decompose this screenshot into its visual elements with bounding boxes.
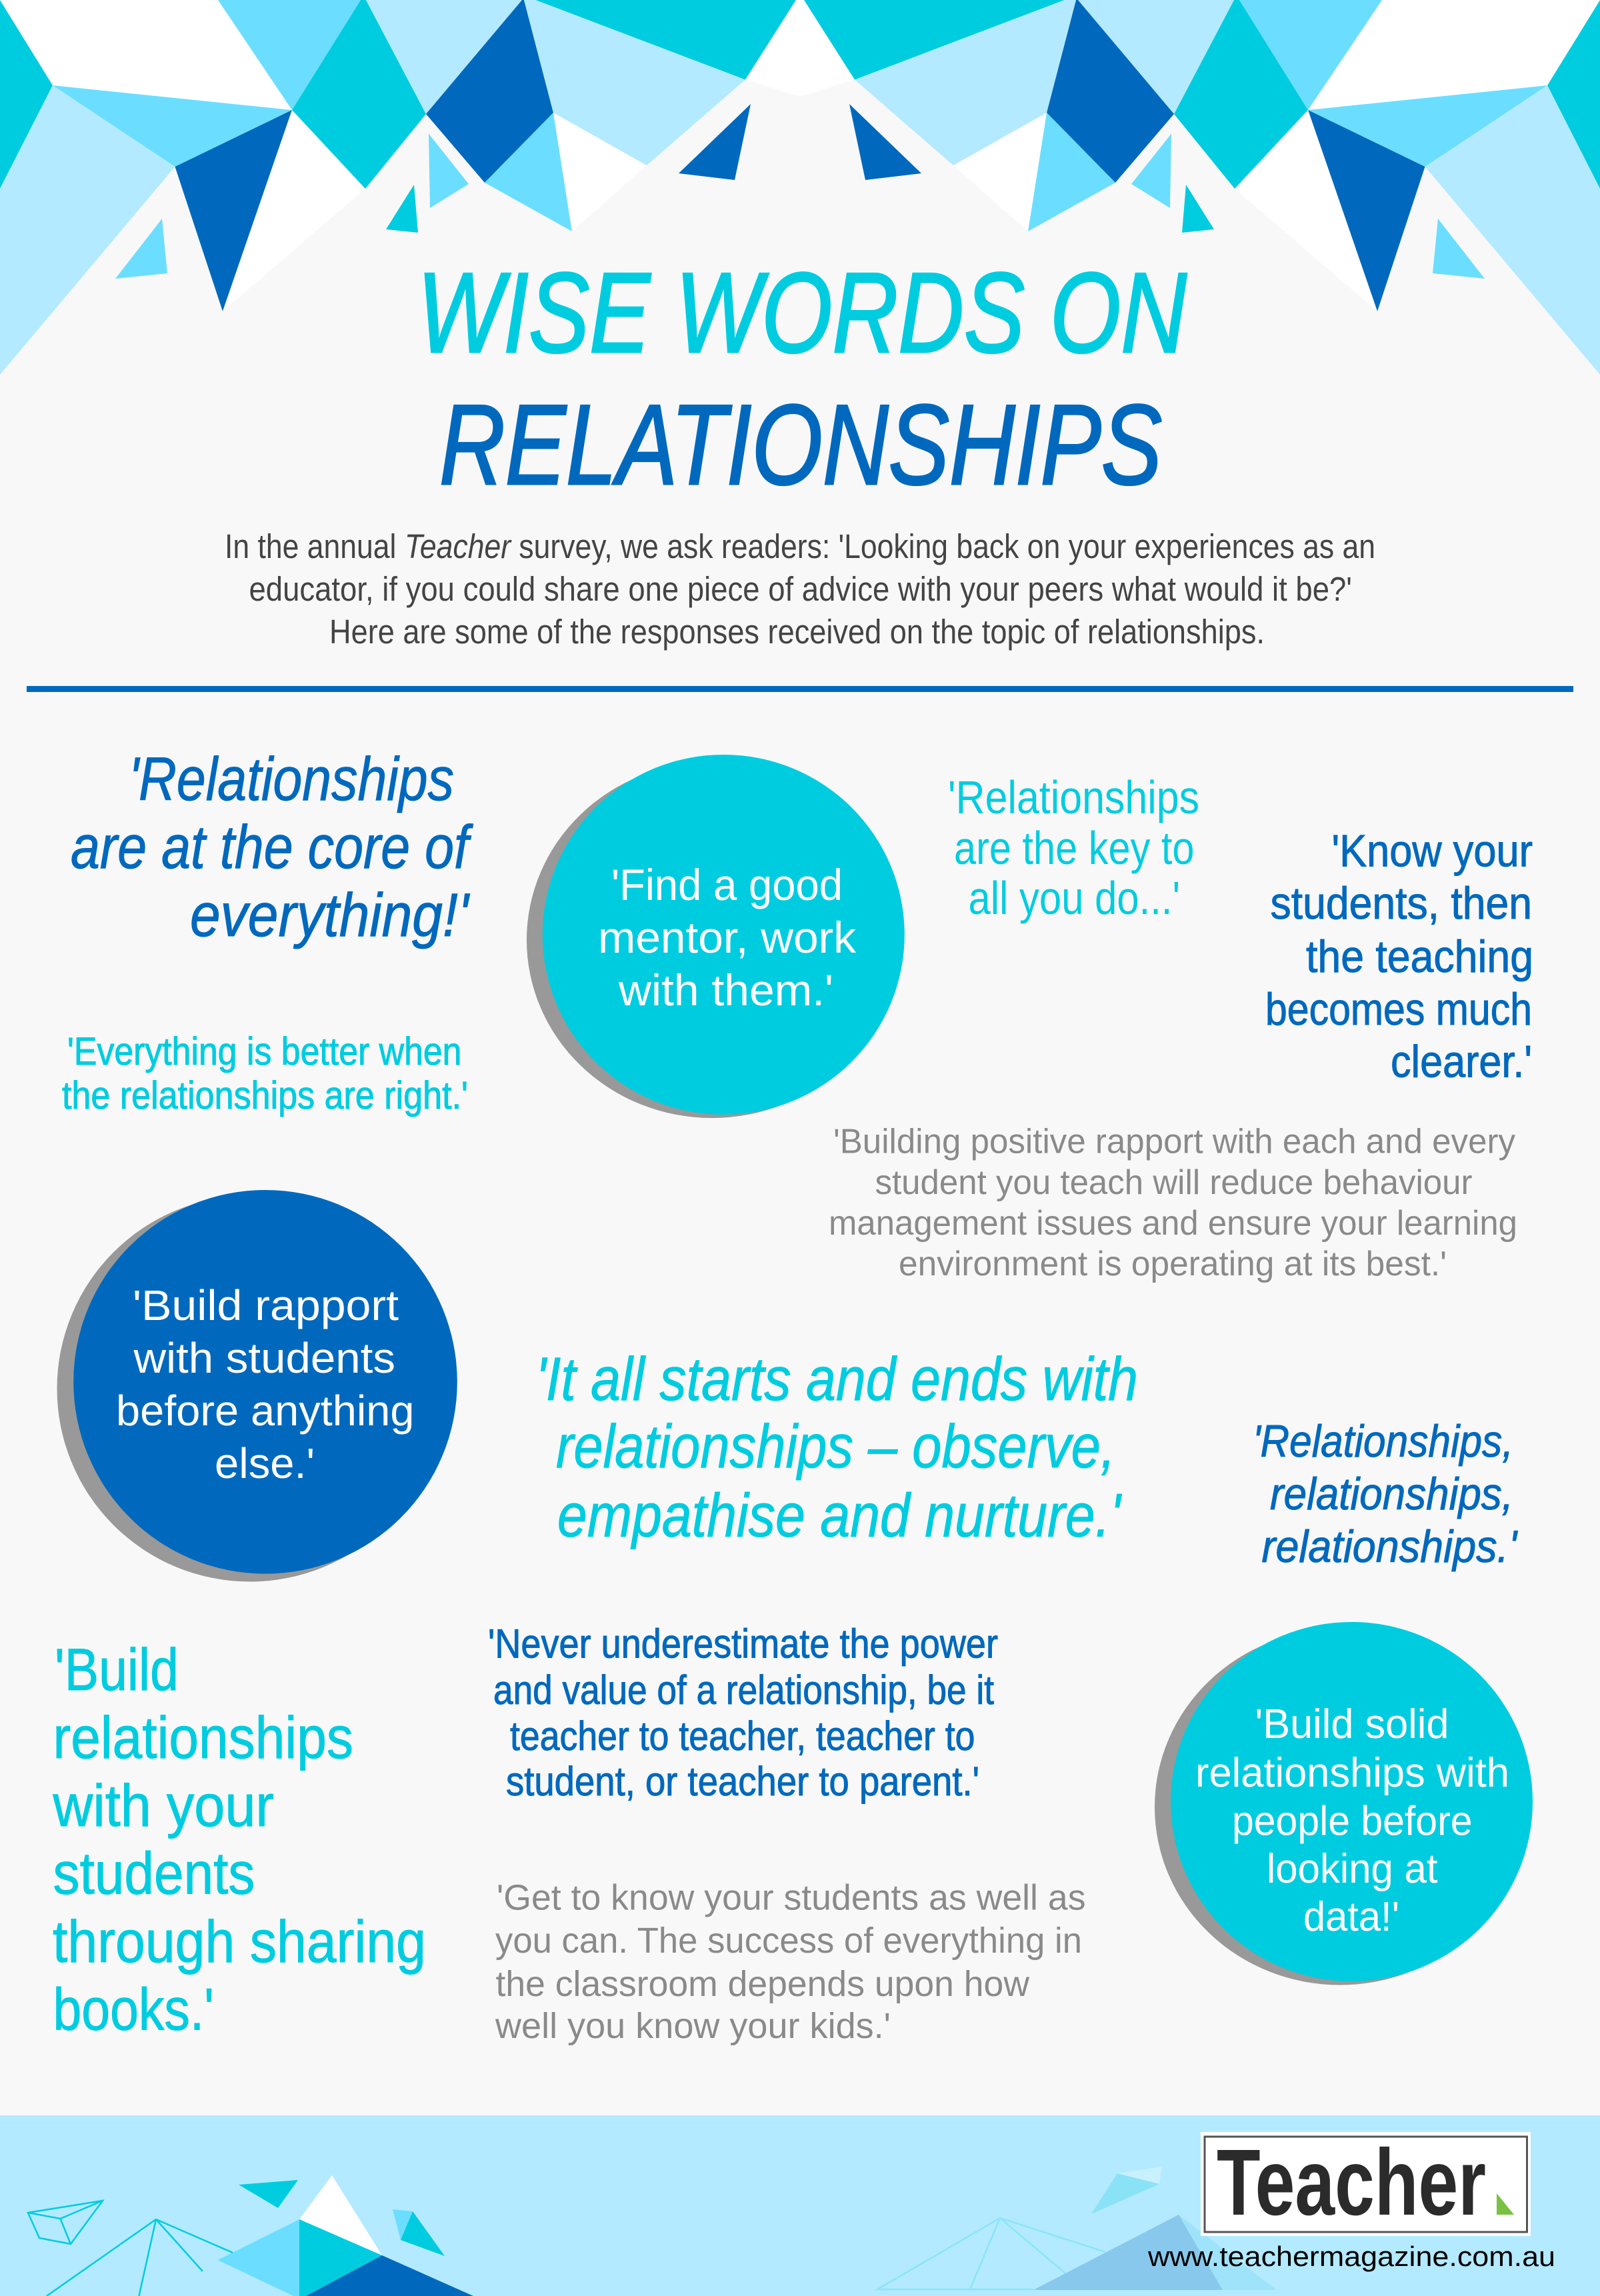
quote: know your students: clearer.': [1391, 1036, 1532, 1087]
quote: know your students: students, then: [1271, 878, 1532, 929]
quote: get to know your students: you can. The success of everything in: [495, 1921, 1082, 1961]
circle: find a good mentor: mentor, work: [598, 913, 857, 962]
quote: relationships x3: relationships,: [1270, 1469, 1513, 1519]
divider: [27, 686, 1573, 692]
quote: build relationships through books: 'Build: [55, 1636, 179, 1703]
quote: everything is better: 'Everything is better when: [67, 1030, 461, 1073]
quote: relationships x3: relationships.': [1261, 1521, 1518, 1572]
quote: relationships are the key: 'Relationships: [948, 771, 1199, 823]
quote: it all starts and ends: [536, 1345, 1138, 1549]
quote: never underestimate: student, or teacher to parent.': [506, 1759, 979, 1804]
quote: know your students: becomes much: [1265, 984, 1532, 1035]
quote: know your students: 'Know your: [1332, 825, 1533, 876]
circle: find a good mentor: with them.': [618, 965, 833, 1015]
logo: Teacher: Teacher: [1217, 2129, 1486, 2235]
footer band: [0, 2115, 1600, 2296]
circle: build rapport: [57, 1190, 457, 1581]
quote: building positive rapport: management issues and ensure your learning: [829, 1204, 1517, 1243]
quote: everything is better: the relationships are right.': [62, 1074, 468, 1117]
footer left geometric shapes: [28, 2175, 473, 2296]
circle: build solid relationships: relationships with: [1195, 1750, 1509, 1796]
intro text: In the annual Teacher survey, we ask readers: 'Looking back on your experiences as an: [225, 527, 1375, 565]
quote: relationships are at the core: are at the core of: [71, 813, 473, 881]
quote: building positive rapport: [829, 1123, 1517, 1283]
quote: building positive rapport: 'Building positive rapport with each and every: [833, 1123, 1515, 1161]
intro text: [225, 527, 1375, 651]
circle: build solid relationships: data!': [1303, 1894, 1399, 1940]
circle: build solid relationships: [1155, 1622, 1533, 1985]
quote: know your students: the teaching: [1306, 931, 1533, 982]
website url: www.teachermagazine.com.au: [1147, 2241, 1555, 2272]
quote: build relationships through books: [53, 1636, 426, 2043]
intro text: Here are some of the responses received on the topic of relationships.: [329, 613, 1265, 651]
quote: building positive rapport: environment is operating at its best.': [899, 1245, 1447, 1283]
quote: everything is better: [62, 1030, 468, 1117]
quote: build relationships through books: books.': [53, 1976, 214, 2043]
quote: build relationships through books: through sharing: [53, 1908, 426, 1975]
circle: build solid relationships: looking at: [1267, 1846, 1437, 1892]
quote: relationships are at the core: 'Relationships: [129, 745, 454, 813]
quote: get to know your students: [495, 1877, 1085, 2046]
quote: relationships are the key: all you do...': [968, 872, 1180, 924]
circle: build rapport: before anything: [116, 1387, 415, 1435]
quote: never underestimate: [488, 1621, 998, 1804]
quote: know your students: [1265, 825, 1533, 1087]
quote: build relationships through books: relationships: [53, 1704, 353, 1771]
quote: get to know your students: 'Get to know your students as well as: [497, 1877, 1085, 1917]
quote: never underestimate: teacher to teacher, teacher to: [510, 1713, 975, 1759]
title: WISE WORDS ON: [417, 249, 1187, 377]
top geometric banner: [0, 0, 1600, 375]
circle: build rapport: with students: [133, 1334, 395, 1382]
quote: it all starts and ends: 'It all starts and ends with: [536, 1345, 1138, 1413]
title: [417, 249, 1187, 509]
quote: building positive rapport: student you teach will reduce behaviour: [875, 1163, 1472, 1202]
quote: build relationships through books: students: [53, 1840, 255, 1907]
circle: build rapport: 'Build rapport: [133, 1281, 399, 1329]
quote: relationships are at the core: [71, 745, 473, 949]
quote: get to know your students: the classroom depends upon how: [496, 1964, 1030, 2004]
quote: relationships are at the core: everything!': [190, 881, 471, 949]
quote: never underestimate: and value of a relationship, be it: [493, 1667, 994, 1713]
title: RELATIONSHIPS: [439, 381, 1162, 509]
circle: find a good mentor: 'Find a good: [611, 860, 843, 909]
quote: it all starts and ends: relationships – observe,: [556, 1413, 1115, 1481]
circle: build solid relationships: people before: [1232, 1799, 1472, 1844]
circle: find a good mentor: [527, 755, 905, 1118]
quote: build relationships through books: with your: [53, 1772, 274, 1839]
circle: build solid relationships: 'Build solid: [1255, 1701, 1449, 1747]
quote: relationships x3: [1253, 1416, 1518, 1572]
quote: it all starts and ends: empathise and nurture.': [557, 1481, 1123, 1549]
quote: relationships are the key: are the key to: [954, 822, 1195, 874]
quote: relationships x3: 'Relationships,: [1253, 1416, 1513, 1467]
quote: relationships are the key: [948, 771, 1199, 924]
intro text: educator, if you could share one piece of advice with your peers what would it be?': [249, 570, 1352, 608]
quote: never underestimate: 'Never underestimate the power: [488, 1621, 998, 1667]
footer right faint shapes: [877, 2167, 1277, 2290]
quote: get to know your students: well you know your kids.': [495, 2006, 891, 2046]
circle: build rapport: else.': [215, 1439, 315, 1487]
